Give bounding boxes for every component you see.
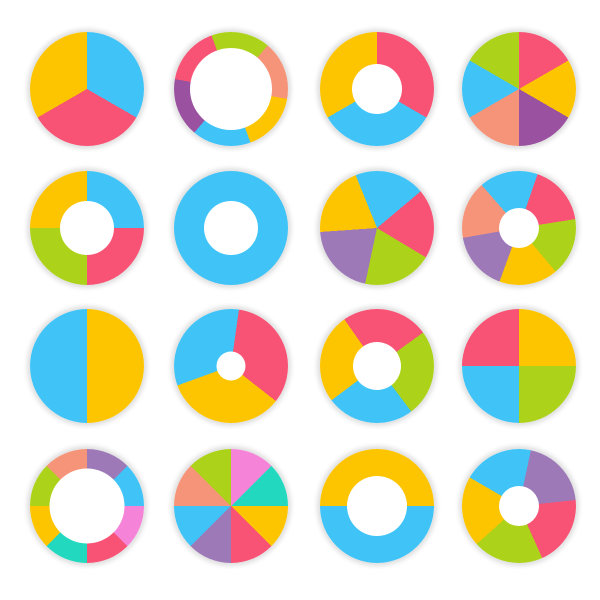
chart r1c2: 6-slice thin ring	[174, 32, 288, 146]
chart r1c3: 3-slice donut	[320, 32, 434, 146]
chart r3c1: half pie	[30, 309, 144, 423]
chart r1c4: 6-slice pie	[462, 32, 576, 146]
chart r2c3: 5-slice pie	[320, 171, 434, 285]
chart r4c2: 8-slice pie	[174, 449, 288, 563]
chart r4c3: half donut	[320, 449, 434, 563]
chart r4c1: 8-slice ring	[30, 449, 144, 563]
chart r4c4: 5-slice donut	[462, 449, 576, 563]
chart r3c4: quarters pie	[462, 309, 576, 423]
chart r3c2: 3-slice small-hole donut	[174, 309, 288, 423]
chart r2c1: 4-slice donut	[30, 171, 144, 285]
chart r3c3: 4-slice rotated donut	[320, 309, 434, 423]
chart r2c4: 6-slice donut	[462, 171, 576, 285]
chart r2c2: full blue donut	[174, 171, 288, 285]
chart r1c1: 3-slice pie	[30, 32, 144, 146]
